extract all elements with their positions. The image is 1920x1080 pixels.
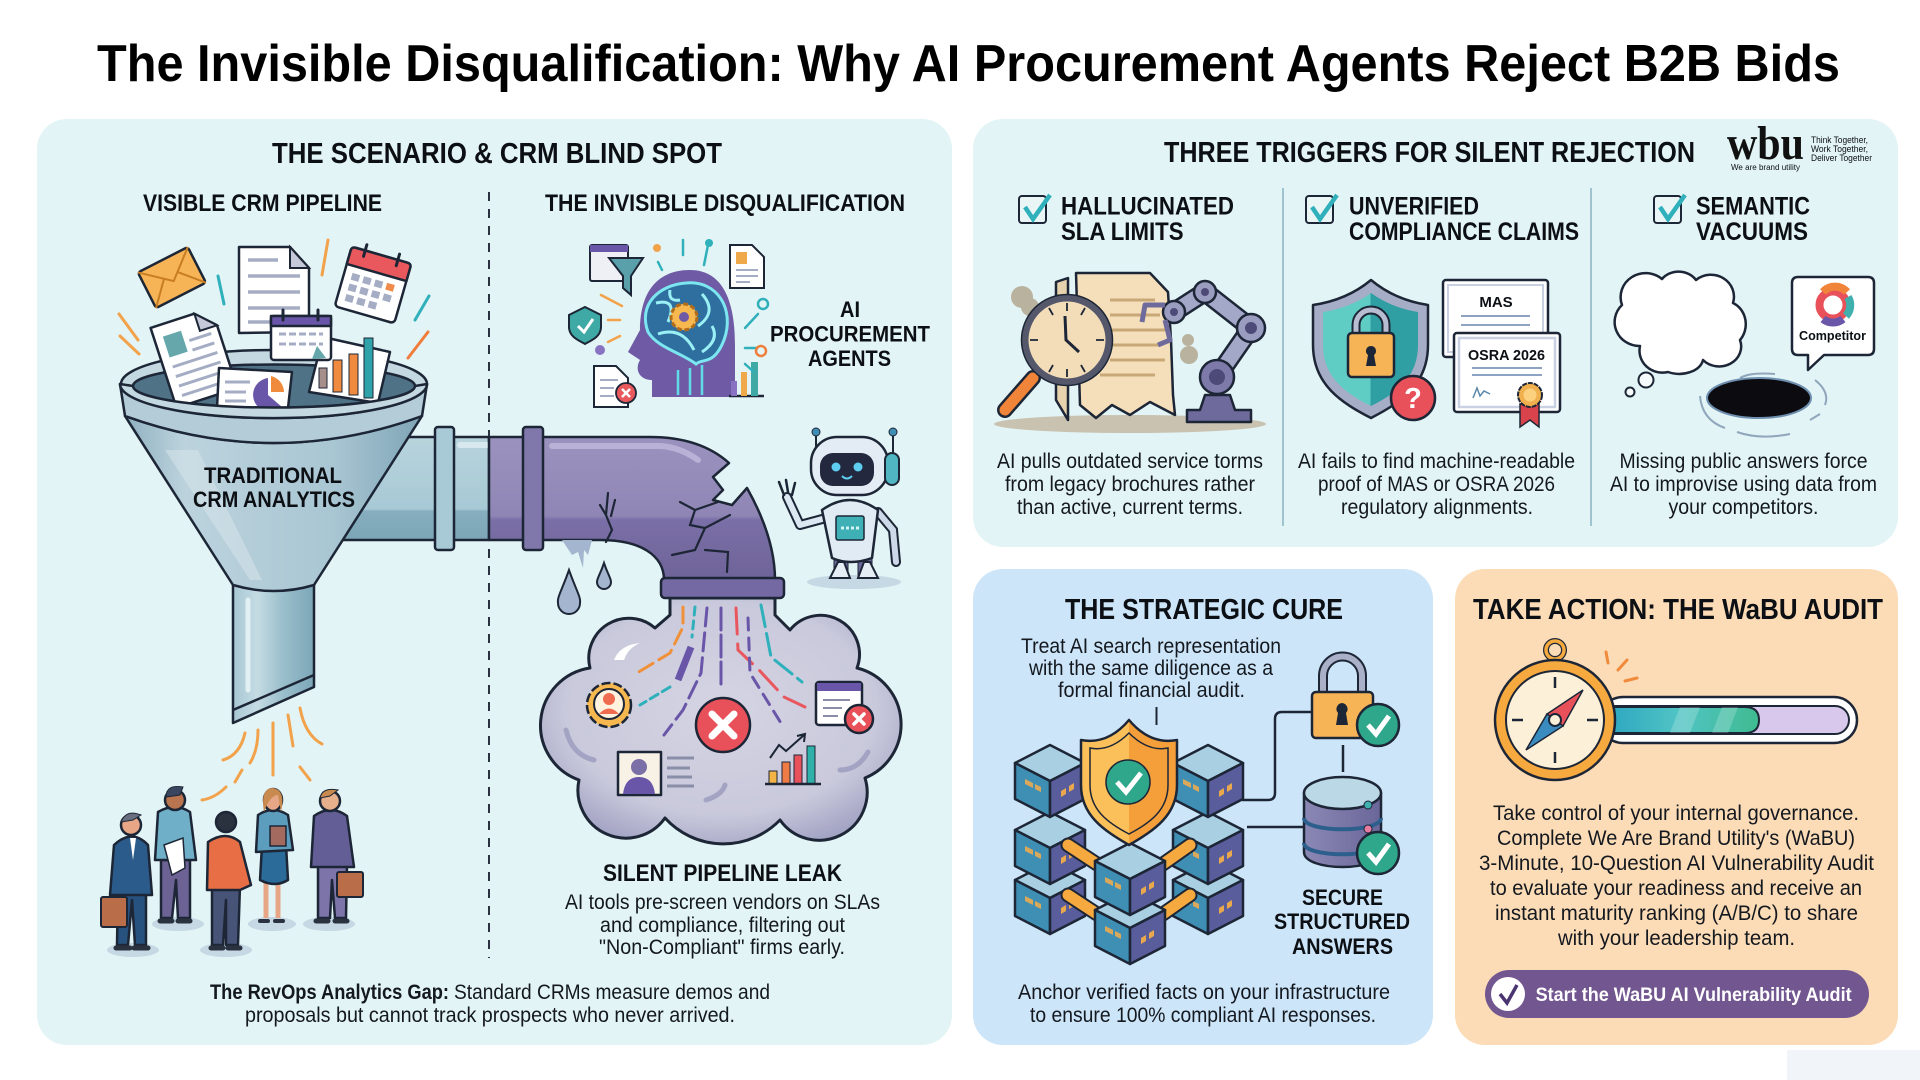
heading bbox=[1061, 192, 1234, 246]
heading bbox=[1349, 192, 1579, 246]
text: silent pipeline leak: and compliance, filtering out bbox=[600, 914, 845, 937]
text: silent pipeline leak bbox=[565, 860, 880, 959]
button: start audit: Start the WaBU AI Vulnerability Audit bbox=[1536, 985, 1852, 1006]
icon: small calendar bbox=[271, 310, 331, 360]
text: silent pipeline leak: SILENT PIPELINE LEAK bbox=[603, 860, 843, 887]
illustration: shield with lock: ? bbox=[1404, 383, 1422, 415]
sparks bbox=[119, 240, 429, 358]
description: than active, current terms. bbox=[1017, 496, 1243, 519]
icon: pie page bbox=[217, 368, 292, 412]
pipe: teal section bbox=[330, 437, 489, 540]
text: audit description: to evaluate your readiness and receive an bbox=[1490, 877, 1862, 900]
icon: rejected doc bbox=[594, 366, 628, 407]
label: secure structured answers bbox=[1274, 885, 1410, 959]
illustration: torn brochure, clock, robot arm bbox=[994, 273, 1266, 433]
icon: database with check bbox=[1304, 777, 1399, 874]
robot arm bbox=[1142, 281, 1265, 422]
heading: VACUUMS bbox=[1696, 218, 1808, 246]
orange flow dashes bbox=[202, 708, 322, 800]
icon: compass bbox=[1495, 641, 1637, 780]
documents entering funnel bbox=[119, 240, 429, 418]
icon: doc top right bbox=[730, 245, 764, 288]
people group bbox=[101, 786, 363, 957]
text: audit description: Complete We Are Brand Utility's (WaBU) bbox=[1497, 827, 1855, 850]
certificate: OSRA 2026 bbox=[1454, 333, 1560, 427]
heading: SLA LIMITS bbox=[1061, 218, 1184, 246]
illustration: empty thought cloud bbox=[1615, 272, 1746, 396]
logo: wbu bbox=[1727, 117, 1872, 172]
description: AI fails to find machine-readable bbox=[1298, 450, 1575, 473]
icon: AI head with brain bbox=[569, 239, 768, 407]
text: audit description: 3-Minute, 10-Question AI Vulnerability Audit bbox=[1479, 852, 1874, 875]
description: Missing public answers force bbox=[1620, 450, 1868, 473]
logo: wbu: Work Together, bbox=[1811, 144, 1868, 154]
icon: gear user bbox=[587, 683, 631, 727]
water drops bbox=[558, 563, 611, 614]
text: RevOps analytics gap: The RevOps Analytics Gap: bbox=[210, 981, 449, 1004]
icon: calendar bbox=[335, 241, 413, 323]
text: treat AI search bbox=[1021, 635, 1281, 702]
column: hallucinated SLA limits bbox=[994, 192, 1266, 519]
description: regulatory alignments. bbox=[1341, 496, 1533, 519]
icon: checkbox bbox=[1306, 195, 1337, 223]
text: RevOps analytics gap: Standard CRMs measure demos and bbox=[454, 981, 770, 1004]
text: audit description bbox=[1479, 802, 1874, 950]
logo: wbu: wbu bbox=[1727, 117, 1804, 170]
funnel label bbox=[193, 463, 355, 512]
pipe: cracked purple section bbox=[435, 427, 775, 580]
person 5 bbox=[303, 789, 363, 931]
text: anchor verified facts: Anchor verified facts on your infrastructure bbox=[1018, 981, 1390, 1004]
heading: COMPLIANCE CLAIMS bbox=[1349, 218, 1579, 246]
gauge: progress bar bbox=[1600, 697, 1857, 743]
gold shield bbox=[1081, 720, 1177, 845]
icon: checkbox bbox=[1019, 195, 1050, 223]
title: The Invisible Disqualification: Why AI Procurement Agents Reject B2B Bids bbox=[97, 35, 1840, 93]
illustration: shield with lock bbox=[1313, 280, 1435, 420]
accents bbox=[601, 240, 758, 372]
label: AI procurement agents: AGENTS bbox=[808, 346, 891, 371]
heading: three triggers: THREE TRIGGERS FOR SILENT REJECTION bbox=[1164, 137, 1695, 169]
collar bbox=[435, 427, 454, 550]
icon: document bbox=[239, 247, 309, 333]
icon: checkbox bbox=[1654, 195, 1685, 223]
logo: wbu: Think Together, bbox=[1811, 135, 1868, 145]
text: silent pipeline leak: "Non-Compliant" firms early. bbox=[599, 936, 845, 959]
logo: wbu: We are brand utility bbox=[1731, 163, 1800, 172]
heading: take action: TAKE ACTION: THE WaBU AUDIT bbox=[1473, 594, 1883, 626]
description: proof of MAS or OSRA 2026 bbox=[1318, 473, 1555, 496]
icon: search listing bbox=[590, 245, 628, 281]
orange links bbox=[1068, 845, 1190, 914]
heading: visible CRM pipeline: VISIBLE CRM PIPELINE bbox=[143, 190, 382, 217]
illustration: competitor bubble: Competitor bbox=[1799, 328, 1866, 343]
text: anchor verified facts bbox=[1018, 981, 1390, 1027]
logo: wbu: Deliver Together bbox=[1811, 153, 1872, 163]
leak cloud bbox=[540, 578, 901, 844]
pipe outlet collar bbox=[661, 578, 784, 598]
person 2 bbox=[152, 786, 204, 931]
leaking data streams bbox=[637, 605, 805, 735]
person 4 bbox=[248, 788, 296, 931]
illustration: competitor bubble bbox=[1792, 277, 1874, 370]
label: AI procurement agents: AI bbox=[840, 297, 860, 322]
description: AI pulls outdated service torms bbox=[997, 450, 1263, 473]
icon: small filter funnel bbox=[609, 258, 643, 295]
text: treat AI search: Treat AI search representation bbox=[1021, 635, 1281, 658]
panel: take action bbox=[1455, 569, 1898, 1045]
person 3 bbox=[200, 812, 252, 957]
description bbox=[997, 450, 1263, 519]
certificate: MAS bbox=[1443, 280, 1548, 357]
label: AI procurement agents: PROCUREMENT bbox=[770, 322, 931, 346]
funnel bbox=[120, 350, 427, 723]
button: start audit bbox=[1485, 970, 1869, 1018]
blockchain cube stack bbox=[1015, 745, 1243, 964]
icon: red x bbox=[696, 698, 750, 752]
label: secure structured answers: STRUCTURED bbox=[1274, 909, 1410, 934]
heading: scenario: THE SCENARIO & CRM BLIND SPOT bbox=[272, 138, 722, 170]
label: secure structured answers: ANSWERS bbox=[1292, 934, 1393, 959]
text: audit description: with your leadership team. bbox=[1557, 927, 1795, 950]
text: treat AI search: with the same diligence as a bbox=[1028, 657, 1273, 680]
icon: chart page bbox=[309, 337, 390, 403]
person 1 bbox=[101, 813, 159, 957]
heading: the invisible disqualification: THE INVISIBLE DISQUALIFICATION bbox=[545, 190, 905, 217]
illustration: black hole bbox=[1700, 374, 1826, 437]
funnel label: TRADITIONAL bbox=[204, 463, 342, 488]
funnel spout bbox=[233, 585, 314, 723]
heading: HALLUCINATED bbox=[1061, 192, 1234, 220]
column: semantic vacuums bbox=[1610, 192, 1877, 519]
icon: report page bbox=[151, 308, 237, 408]
icon: teal shield bbox=[569, 307, 601, 344]
connector lines bbox=[1242, 712, 1343, 827]
collar bbox=[523, 427, 543, 550]
text: audit description: Take control of your internal governance. bbox=[1493, 802, 1859, 825]
heading bbox=[1696, 192, 1810, 246]
description: your competitors. bbox=[1668, 496, 1818, 519]
panel: the strategic cure bbox=[973, 569, 1433, 1045]
icon: small chart bbox=[729, 395, 764, 397]
magnifier clock bbox=[1005, 294, 1112, 410]
text: audit description: instant maturity ranking (A/B/C) to share bbox=[1495, 902, 1858, 925]
text: silent pipeline leak: AI tools pre-screen vendors on SLAs bbox=[565, 891, 880, 914]
icon: robot bbox=[779, 428, 901, 589]
text: RevOps analytics gap bbox=[210, 981, 770, 1027]
label: secure structured answers: SECURE bbox=[1302, 885, 1383, 910]
panel: three triggers bbox=[973, 117, 1898, 547]
icon: rising bars bbox=[765, 734, 821, 784]
funnel rim bbox=[120, 384, 427, 443]
icon: envelope bbox=[138, 247, 206, 308]
text: RevOps analytics gap: proposals but cannot track prospects who never arrived. bbox=[245, 1004, 735, 1027]
icon: applicant profile bbox=[618, 752, 694, 795]
heading: UNVERIFIED bbox=[1349, 192, 1479, 220]
icon: browser window rejected bbox=[816, 682, 873, 733]
certificate: OSRA 2026: OSRA 2026 bbox=[1468, 347, 1545, 364]
column: unverified compliance claims bbox=[1298, 192, 1579, 519]
heading: SEMANTIC bbox=[1696, 192, 1810, 220]
description bbox=[1298, 450, 1575, 519]
heading: strategic cure: THE STRATEGIC CURE bbox=[1065, 594, 1343, 626]
text: treat AI search: formal financial audit. bbox=[1058, 679, 1245, 702]
front lip of funnel bbox=[120, 384, 427, 418]
description: AI to improvise using data from bbox=[1610, 473, 1877, 496]
icon: padlock with check bbox=[1312, 656, 1399, 746]
description bbox=[1610, 450, 1877, 519]
text: anchor verified facts: to ensure 100% compliant AI responses. bbox=[1030, 1004, 1376, 1027]
label: AI procurement agents bbox=[770, 297, 931, 371]
panel: the scenario and CRM blind spot bbox=[37, 119, 952, 1045]
description: from legacy brochures rather bbox=[1005, 473, 1255, 496]
certificate: MAS: MAS bbox=[1479, 294, 1513, 311]
funnel cone bbox=[125, 416, 422, 591]
funnel label: CRM ANALYTICS bbox=[193, 487, 355, 512]
